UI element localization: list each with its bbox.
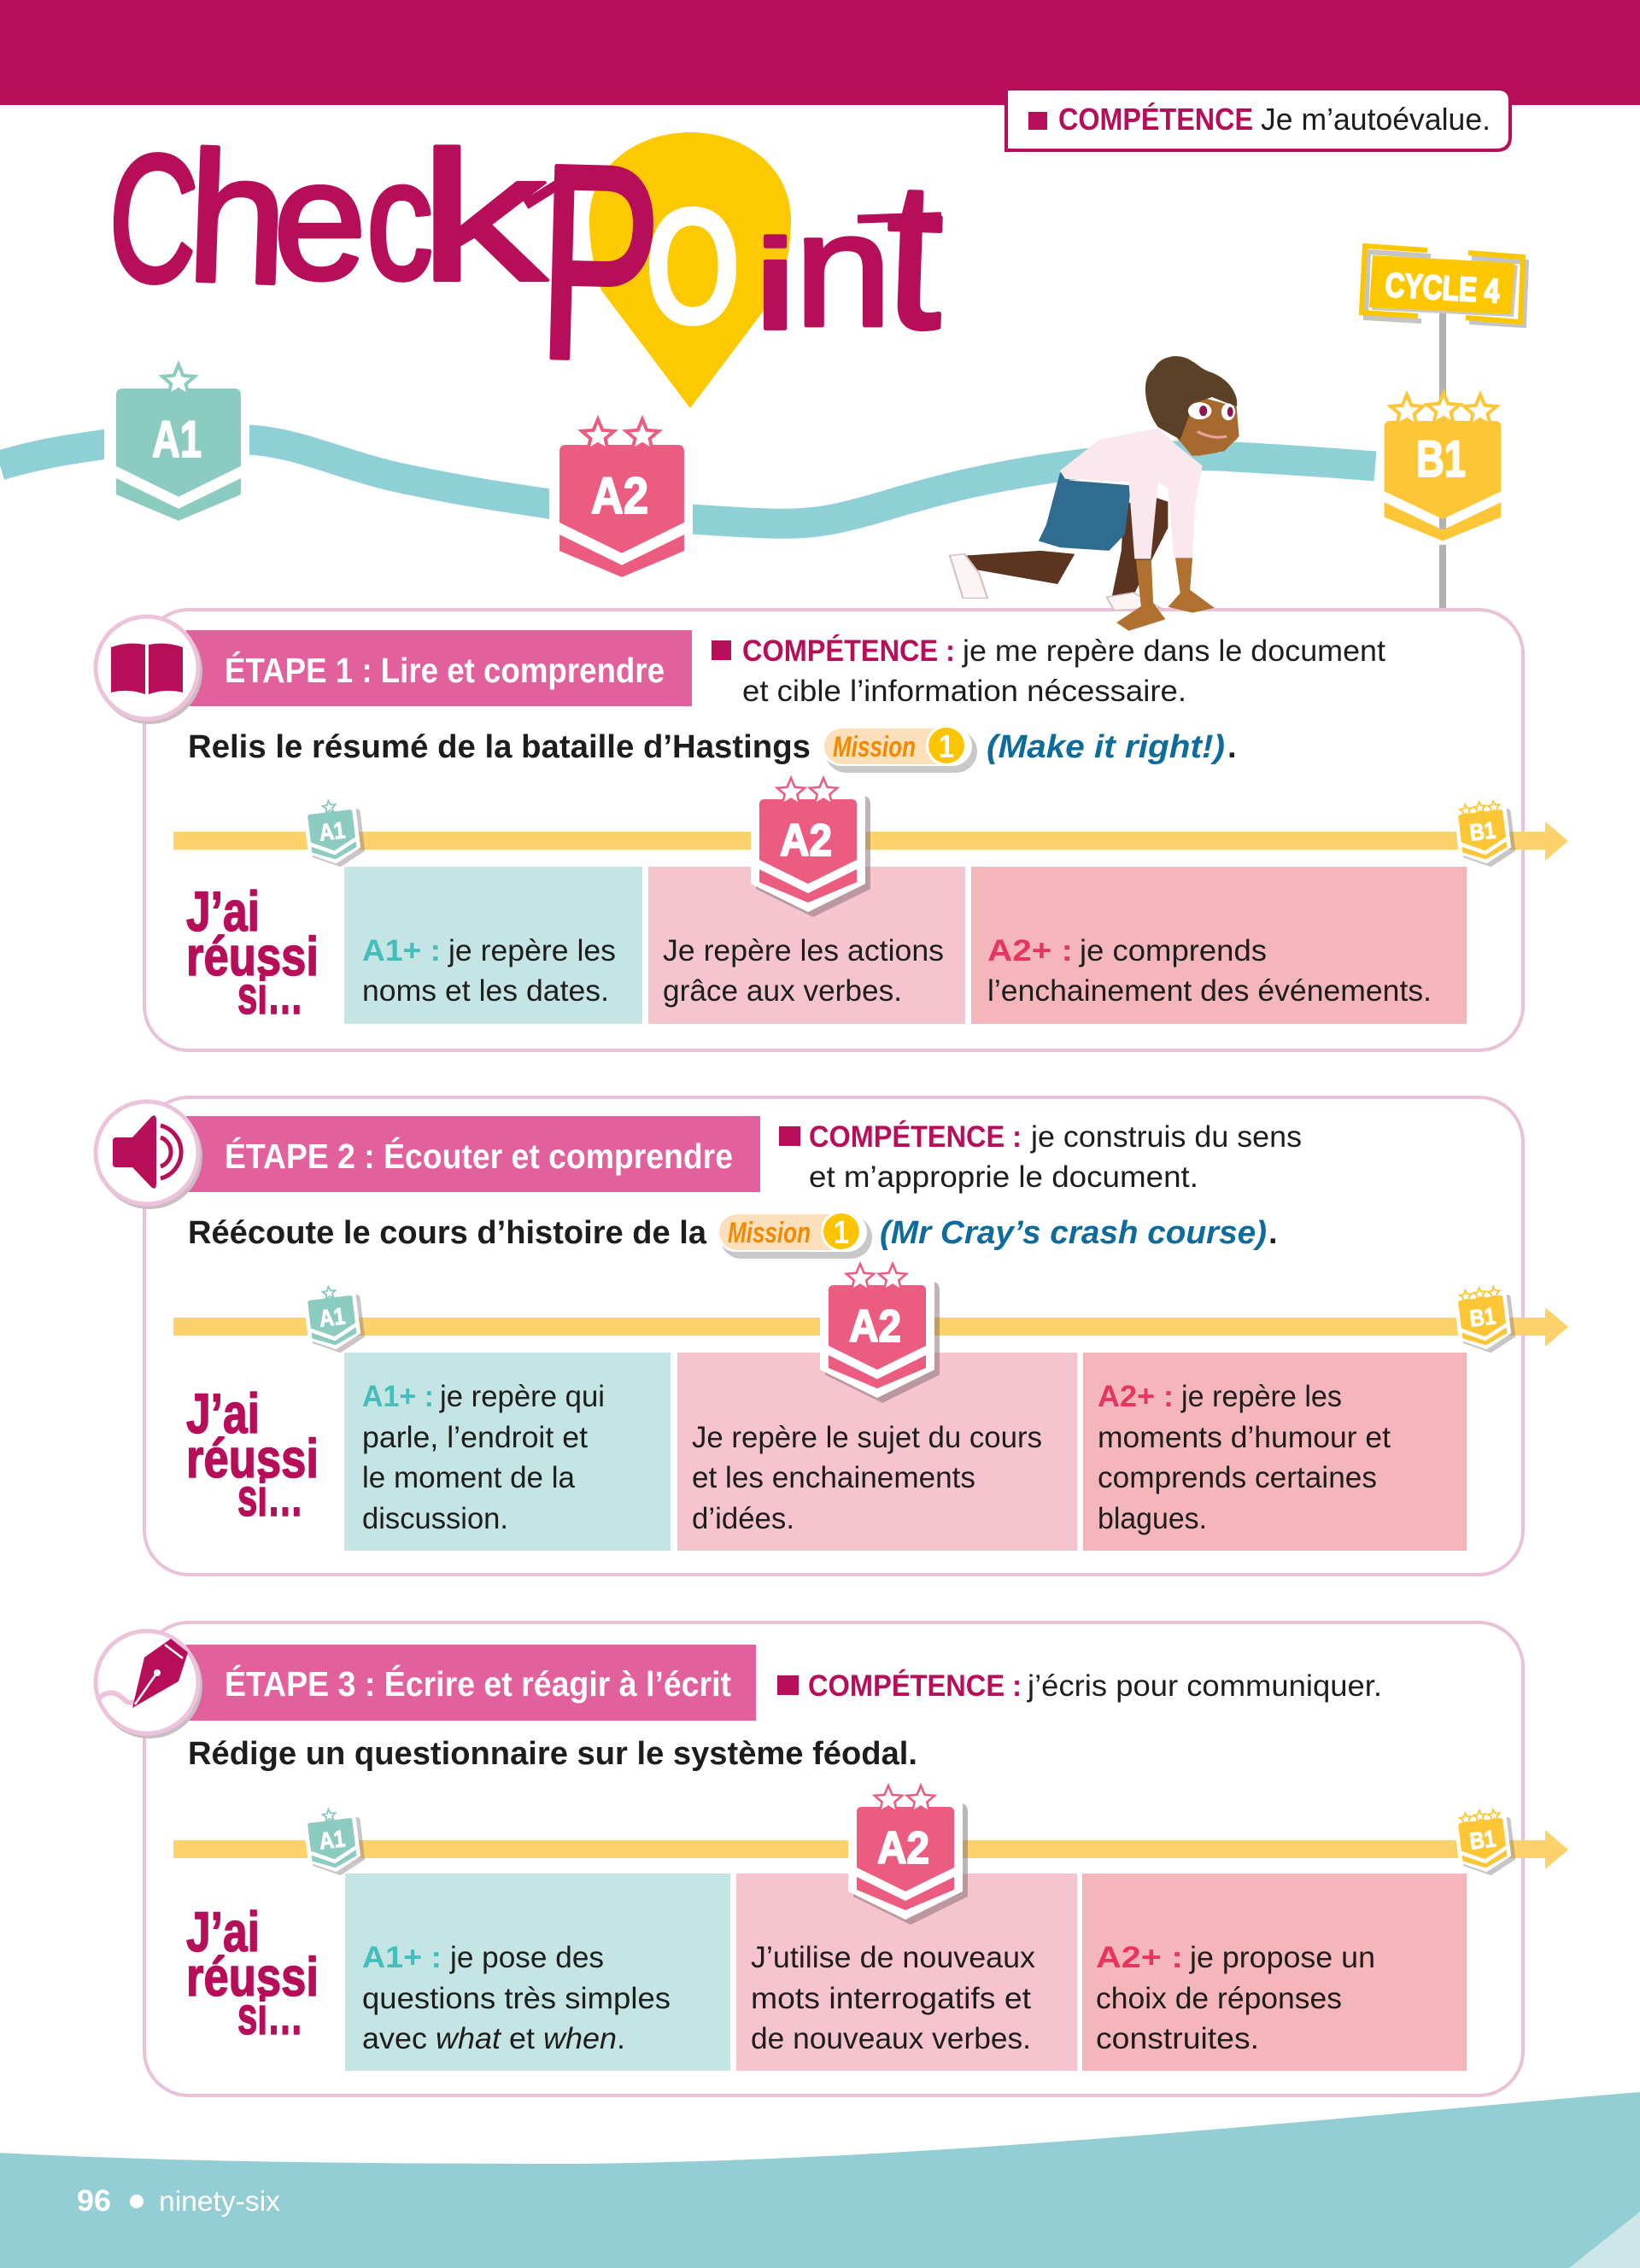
competence 3: j’écris pour communiquer. — [1027, 1669, 1382, 1703]
title: CheckPoint — [104, 107, 946, 419]
title: CheckPoint: O — [644, 172, 741, 360]
competence 1: et cible l’information nécessaire. — [742, 675, 1186, 708]
mission tag: Mission — [833, 731, 916, 763]
instruction 1: (Make it right!) — [987, 729, 1225, 765]
title: CheckPoint: t — [882, 137, 946, 373]
instruction 2: (Mr Cray’s crash course) — [880, 1215, 1267, 1251]
level cells 3: J’utilise de nouveaux — [751, 1941, 1036, 1974]
competence 1: COMPÉTENCE : — [742, 634, 955, 668]
level cells 3: avec what et when. — [362, 2022, 625, 2055]
badge: A2 on route — [559, 419, 684, 577]
competence 1: je me repère dans le document — [962, 634, 1385, 668]
title: CheckPoint: n — [794, 178, 892, 359]
label: j'ai réussi si — [186, 1382, 319, 1528]
badge: small A1: A1 — [318, 816, 347, 846]
level cells 2: discussion. — [362, 1502, 508, 1535]
footer light corner — [1569, 2212, 1640, 2268]
level cells 2: je repère qui — [439, 1380, 605, 1413]
map pin behind title — [589, 132, 791, 408]
level cells 3: construites. — [1096, 2022, 1259, 2055]
level route ribbon — [0, 440, 1375, 523]
competence tag: self-assessment: Je m’autoévalue. — [1261, 102, 1491, 137]
level cells 3: je pose des — [449, 1941, 604, 1974]
panel 2: listening — [96, 1097, 1568, 1575]
level cells 1: A1+ : — [362, 934, 441, 967]
cycle pole — [1439, 312, 1446, 611]
badge: large A2 — [751, 778, 870, 917]
label: j'ai réussi si: J’ai — [186, 1900, 260, 1963]
competence 1 — [712, 634, 1385, 708]
mission tag: 1 — [939, 729, 954, 765]
top band — [0, 0, 1640, 105]
title: CheckPoint: c — [366, 125, 433, 315]
badge: small B1 — [1453, 798, 1517, 871]
title: CheckPoint: e — [273, 124, 366, 314]
label: j'ai réussi si: réussi — [186, 926, 319, 987]
label: j'ai réussi si: réussi — [186, 1428, 319, 1489]
level cells 2: moments d’humour et — [1098, 1421, 1391, 1454]
step 3 banner: ÉTAPE 3 : Écrire et réagir à l’écrit — [225, 1664, 731, 1704]
level cells 2: A2+ : — [1098, 1380, 1174, 1413]
label: j'ai réussi si: J’ai — [186, 1382, 260, 1445]
page number: ninety-six — [159, 2185, 280, 2217]
instruction 2: Réécoute le cours d’histoire de la — [188, 1215, 707, 1251]
level cells 3: A1+ : — [362, 1941, 442, 1974]
level cells 2: le moment de la — [362, 1461, 576, 1494]
mission tag: 1 — [834, 1215, 849, 1251]
level cells 2: et les enchainements — [692, 1461, 975, 1494]
step 3 banner — [186, 1645, 756, 1721]
badge: small B1 — [1453, 1807, 1517, 1879]
step 1 banner: ÉTAPE 1 : Lire et comprendre — [225, 651, 665, 690]
step 2 banner: ÉTAPE 2 : Écouter et comprendre — [225, 1137, 733, 1176]
title: CheckPoint: P — [535, 107, 665, 419]
level cells 2: A1+ : — [362, 1380, 434, 1413]
title: CheckPoint: i — [753, 213, 798, 356]
level cells 2: je repère les — [1180, 1380, 1342, 1413]
badge: small B1: B1 — [1468, 816, 1497, 846]
level cells 2: Je repère le sujet du cours — [692, 1421, 1042, 1454]
badge: B1 on route — [1385, 393, 1501, 545]
icon: fountain pen — [96, 1631, 202, 1739]
panel 3 frame — [144, 1622, 1523, 2096]
badge: small B1 — [1453, 1284, 1517, 1357]
level cells 2: blagues. — [1098, 1502, 1207, 1535]
badge: large A2 — [848, 1786, 968, 1925]
icon: speaker — [96, 1102, 202, 1209]
mission tag: Mission — [728, 1217, 811, 1249]
instruction 1: Relis le résumé de la bataille d’Hastings — [188, 729, 811, 765]
badge: small A1: A1 — [318, 1302, 347, 1332]
label: j'ai réussi si — [186, 880, 319, 1026]
level cells 1: A2+ : — [987, 934, 1073, 967]
badge: small B1: B1 — [1468, 1825, 1497, 1855]
level cells 3: de nouveaux verbes. — [751, 2022, 1031, 2055]
competence 3: COMPÉTENCE : — [808, 1669, 1022, 1703]
step 2 banner — [186, 1116, 760, 1192]
label: j'ai réussi si — [186, 1900, 319, 2046]
instruction 2 — [188, 1211, 1278, 1259]
competence 2: COMPÉTENCE : — [809, 1119, 1022, 1154]
level cells 3 — [345, 1873, 1467, 2071]
competence 2 — [779, 1119, 1302, 1194]
level cells 1: l’enchainement des événements. — [987, 974, 1432, 1008]
sign: cycle 4 — [1362, 246, 1526, 325]
badge: large A2: A2 — [877, 1823, 929, 1873]
competence tag: self-assessment — [1006, 89, 1510, 150]
sign: cycle 4: CYCLE 4 — [1384, 266, 1501, 310]
badge: A1 on route — [116, 365, 241, 521]
level cells 1: noms et les dates. — [362, 974, 609, 1008]
badge: large A2: A2 — [849, 1301, 901, 1352]
level cells 1: grâce aux verbes. — [663, 974, 902, 1008]
title: CheckPoint: h — [184, 114, 291, 324]
level cells 1: je repère les — [448, 934, 616, 967]
page number: 96 — [77, 2184, 111, 2218]
level cells 3: je propose un — [1189, 1941, 1375, 1974]
panel 1 frame — [144, 610, 1523, 1050]
illustration: girl in starting position — [950, 356, 1239, 631]
badge: small A1 — [302, 797, 366, 871]
instruction 1 — [188, 725, 1237, 773]
title: CheckPoint: C — [104, 115, 202, 322]
title: CheckPoint: k — [419, 114, 551, 319]
mission tag — [822, 725, 977, 773]
badge: A2 on route: A2 — [591, 467, 648, 524]
competence 2: je construis du sens — [1030, 1120, 1302, 1154]
icon: open book — [96, 617, 202, 724]
panel 2 frame — [144, 1097, 1523, 1575]
badge: small A1 — [302, 1805, 366, 1879]
badge: B1 on route: B1 — [1416, 430, 1466, 488]
label: j'ai réussi si: si… — [237, 1469, 303, 1528]
panel 1: reading — [96, 617, 1568, 1026]
competence tag: self-assessment: COMPÉTENCE — [1058, 102, 1253, 137]
page number — [77, 2184, 280, 2218]
step 1 banner — [186, 630, 692, 706]
level cells 2 — [344, 1353, 1467, 1551]
timeline 2 — [173, 1283, 1568, 1357]
instruction 1: . — [1227, 729, 1237, 765]
competence 3 — [777, 1669, 1382, 1703]
level cells 2: parle, l’endroit et — [362, 1421, 588, 1454]
level cells 2: d’idées. — [692, 1502, 794, 1535]
label: j'ai réussi si: si… — [237, 1987, 303, 2046]
timeline 1 — [173, 797, 1568, 871]
footer wave — [0, 2092, 1640, 2268]
level cells 2: comprends certaines — [1098, 1461, 1377, 1494]
instruction 2: . — [1268, 1215, 1278, 1251]
competence 2: et m’approprie le document. — [809, 1160, 1198, 1194]
instruction 3: Rédige un questionnaire sur le système féodal. — [188, 1736, 917, 1772]
level cells 3: A2+ : — [1096, 1941, 1183, 1974]
level cells 1 — [344, 867, 1467, 1024]
badge: small A1: A1 — [318, 1825, 347, 1855]
level cells 3: questions très simples — [362, 1982, 671, 2015]
level cells 3: choix de réponses — [1096, 1982, 1342, 2015]
label: j'ai réussi si: J’ai — [186, 880, 260, 943]
badge: large A2 — [820, 1264, 940, 1403]
mission tag — [717, 1211, 872, 1259]
level cells 3: mots interrogatifs et — [751, 1982, 1031, 2015]
label: j'ai réussi si: réussi — [186, 1946, 319, 2008]
badge: small A1 — [302, 1283, 366, 1357]
level cells 1: je comprends — [1079, 934, 1267, 967]
label: j'ai réussi si: si… — [237, 967, 303, 1026]
panel 3: writing — [96, 1622, 1568, 2096]
badge: large A2: A2 — [780, 815, 832, 866]
badge: small B1: B1 — [1468, 1302, 1497, 1332]
level cells 1: Je repère les actions — [663, 934, 944, 967]
badge: A1 on route: A1 — [152, 411, 202, 468]
timeline 3 — [173, 1805, 1568, 1879]
